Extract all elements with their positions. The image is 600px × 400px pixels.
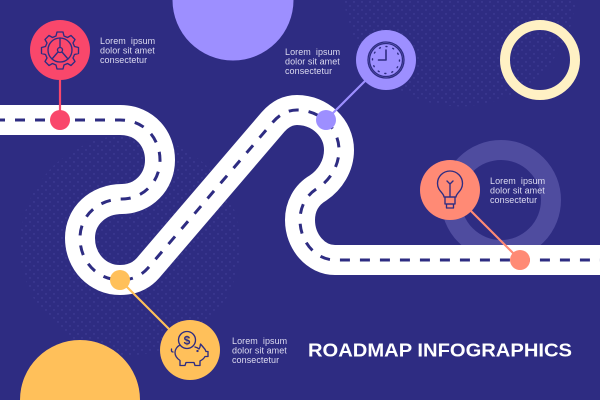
text 2: consectetur <box>285 66 332 76</box>
winding road <box>0 110 600 280</box>
icon circle 3 <box>420 160 480 220</box>
connector line 1 <box>59 78 61 120</box>
icon: clock <box>368 42 404 78</box>
dollar sign: $ <box>184 334 191 348</box>
connector line 3 <box>450 190 520 260</box>
icon circle 4 <box>160 320 220 380</box>
icon: gear <box>42 32 78 69</box>
text 3: Lorem ipsum <box>490 176 545 186</box>
road marker 3 <box>510 250 530 270</box>
step 2: clock <box>285 30 416 130</box>
decorative ring: faded purple <box>451 150 551 250</box>
decorative circle: top purple <box>172 0 294 60</box>
text 4: dolor sit amet <box>232 346 287 356</box>
connector line 4 <box>120 280 190 350</box>
icon: piggy bank <box>171 332 208 366</box>
decorative circle: bottom yellow <box>20 340 140 400</box>
road marker 2 <box>316 110 336 130</box>
step 3: light bulb <box>420 160 545 270</box>
road marker 1 <box>50 110 70 130</box>
text 3: dolor sit amet <box>490 186 545 196</box>
text 2: Lorem ipsum <box>285 47 340 57</box>
step 1: gear <box>30 20 155 130</box>
road marker 4 <box>110 270 130 290</box>
text 2: dolor sit amet <box>285 56 340 66</box>
text 4: consectetur <box>232 355 279 365</box>
text 1: Lorem ipsum <box>100 36 155 46</box>
icon circle 2 <box>356 30 416 90</box>
icon circle 1 <box>30 20 90 80</box>
text 1: consectetur <box>100 55 147 65</box>
step 4: piggy bank <box>110 270 287 380</box>
text 4: Lorem ipsum <box>232 336 287 346</box>
text 3: consectetur <box>490 195 537 205</box>
text 1: dolor sit amet <box>100 46 155 56</box>
title: ROADMAP INFOGRAPHICS <box>308 340 572 360</box>
icon: bulb <box>438 171 462 208</box>
connector line 2 <box>326 60 386 120</box>
decorative ring: cream <box>505 25 575 95</box>
